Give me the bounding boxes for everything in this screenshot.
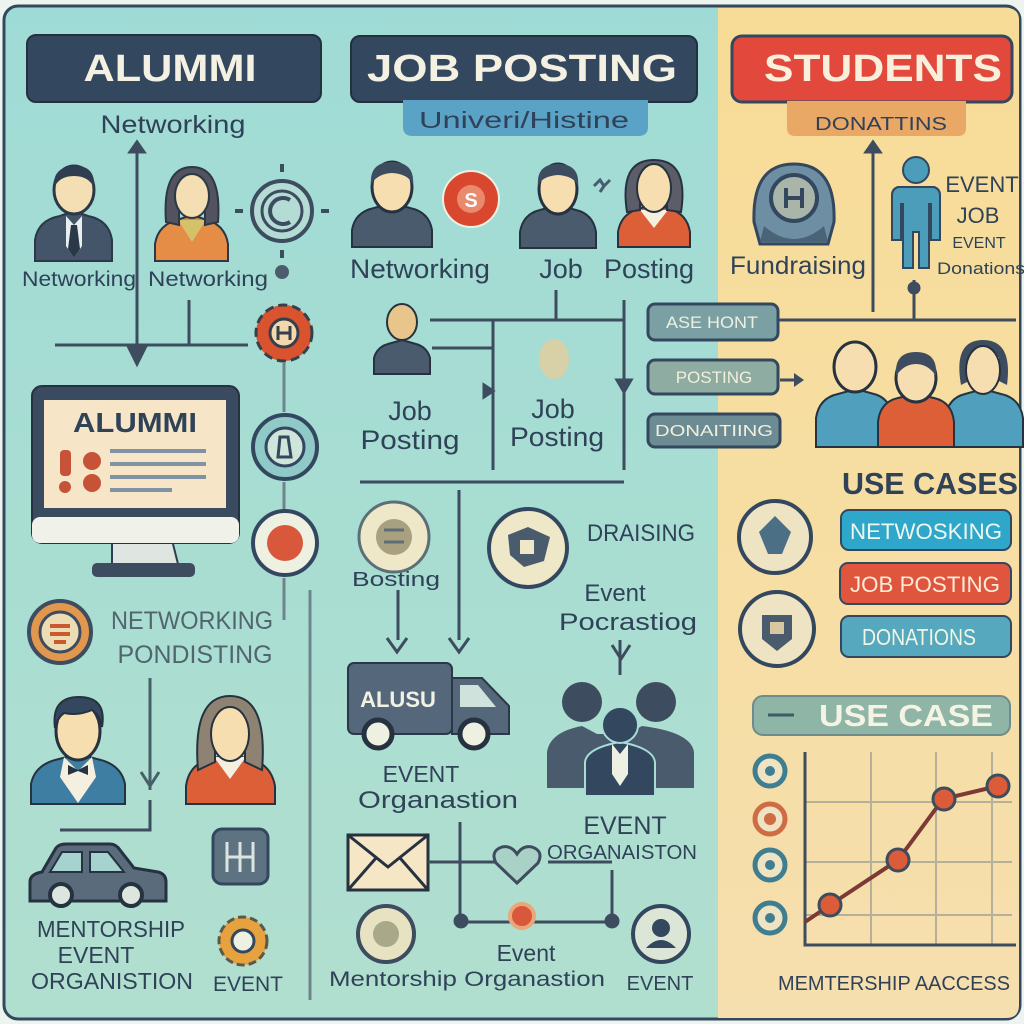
icon: faded person [539, 339, 569, 379]
icon: person small [374, 304, 430, 374]
text: event job list: Donations [937, 259, 1024, 278]
tag: donations [648, 414, 780, 447]
icon: mentorship circle [358, 906, 414, 962]
icon: computer monitor [32, 386, 239, 577]
panel: students column [648, 36, 1024, 995]
icon: red gear [256, 305, 312, 361]
label: event: EVENT [213, 973, 283, 996]
label: event bottom: EVENT [627, 973, 693, 995]
icon: car [30, 844, 166, 906]
panel: alumni column [22, 35, 329, 1000]
chart line [805, 786, 998, 922]
subheading: university posting [403, 100, 648, 136]
icon: woman [155, 167, 228, 261]
icon: person middle [520, 164, 596, 248]
icon: orange gear [219, 917, 267, 965]
label: job posting left [360, 396, 460, 455]
tag: posting [648, 360, 778, 394]
pill: networking [841, 510, 1011, 550]
icon: envelope [348, 835, 428, 890]
text: networking pondisting: NETWORKING [111, 607, 273, 635]
label: job posting center: Posting [510, 422, 604, 452]
icon: teal circle document [253, 415, 317, 479]
icon: target badge [235, 164, 329, 279]
label: event organisation left [358, 761, 518, 814]
pill: donations: DONATIONS [862, 624, 976, 650]
icon: use case circle top [739, 501, 811, 573]
icon: person circle [633, 906, 689, 962]
arrow: tag to group [780, 373, 804, 387]
chart axes [805, 752, 1016, 945]
heading: students: STUDENTS [764, 48, 1002, 90]
pill: use case [753, 696, 1010, 735]
icon: red coin: S [464, 190, 478, 212]
icon: man with tie [35, 166, 112, 261]
icon: woman right [618, 160, 690, 247]
label: job posting left: Posting [360, 425, 460, 455]
tag: posting: POSTING [676, 368, 752, 387]
label: job posting center: Job [531, 394, 575, 424]
connector lines [360, 290, 631, 675]
label: networking: Networking [350, 254, 490, 284]
icon: heart [494, 847, 540, 883]
text: event job list: EVENT [945, 172, 1019, 197]
icon: fundraising person [754, 164, 834, 244]
pill: job posting: JOB POSTING [850, 572, 1000, 597]
label: event pocrastiog [559, 580, 697, 636]
subheading: donations: DONATTINS [815, 114, 947, 134]
label: job posting left: Job [388, 396, 432, 426]
tag: ase hont [648, 304, 778, 340]
icon: orange badge [29, 601, 91, 663]
text: event job list: EVENT [952, 235, 1006, 252]
text: networking pondisting [111, 607, 273, 669]
text: event job list: JOB [957, 203, 999, 228]
subheading: university posting: Univeri/Histine [419, 107, 629, 133]
text: mentorship event organisation: EVENT [58, 942, 134, 968]
chart points [819, 775, 1009, 916]
chart: line chart [755, 752, 1016, 945]
icon: man in suit [31, 697, 125, 804]
heading: job posting: JOB POSTING [367, 48, 677, 90]
text: monitor title: ALUMMI [73, 407, 197, 438]
tag: ase hont: ASE HONT [666, 313, 758, 332]
label: networking right: Networking [148, 268, 268, 291]
text: networking pondisting: PONDISTING [118, 641, 272, 669]
panel: job posting column [329, 36, 697, 995]
icon: students group [816, 340, 1023, 447]
icon: woman in red [186, 696, 275, 804]
connector lines lower [428, 822, 618, 927]
label: bosting: Bosting [352, 569, 440, 591]
pill: networking: NETWOSKING [850, 519, 1002, 544]
label: event organisation right: ORGANAISTON [547, 842, 697, 864]
heading: students [732, 36, 1012, 102]
label: event organisation left: EVENT [383, 761, 459, 787]
icon: delivery truck [348, 663, 509, 748]
label: event organisation right [547, 812, 697, 864]
label: event pocrastiog: Event [584, 580, 646, 607]
label: fundraising: Fundraising [730, 252, 866, 280]
text: mentorship event organisation: ORGANISTION [31, 968, 193, 994]
label: networking top: Networking [100, 111, 246, 139]
arrow: down small [141, 678, 159, 790]
label: mentorship access: MEMTERSHIP AACCESS [778, 973, 1010, 995]
icon: map circle [489, 509, 567, 587]
label: event center: Event [497, 940, 556, 966]
label: networking left: Networking [22, 268, 136, 291]
label: mentorship organisation: Mentorship Organastion [329, 968, 605, 991]
icon: standing figure [892, 157, 940, 268]
text: event job list [937, 172, 1024, 278]
icon: red dot [510, 904, 534, 928]
label: event pocrastiog: Pocrastiog [559, 609, 697, 636]
pill: job posting [840, 563, 1011, 604]
subheading: donations [787, 101, 966, 136]
pill: donations [841, 616, 1011, 657]
arrow: students vertical [655, 142, 1016, 320]
pill: use case: USE CASE [819, 698, 993, 733]
label: job posting center [510, 394, 604, 452]
monitor content [59, 450, 206, 493]
chart legend icons [755, 756, 785, 933]
heading: job posting [351, 36, 697, 102]
icon: group of people [547, 682, 694, 796]
icon: document tile [213, 829, 268, 884]
connector: elbow [60, 800, 150, 830]
label: event organisation right: EVENT [583, 812, 667, 840]
chart grid [805, 752, 1012, 945]
label: job: Job [539, 254, 583, 284]
label: posting: Posting [604, 254, 694, 284]
icon: red coin [443, 171, 499, 227]
arrow: vertical alumni connector [55, 142, 248, 364]
label: event organisation left: Organastion [358, 787, 518, 814]
heading: use cases: USE CASES [842, 466, 1018, 501]
icon: use case circle bottom [740, 592, 814, 666]
heading: alumni: ALUMMI [84, 48, 256, 90]
icon: red circle [253, 511, 317, 575]
heading: alumni [27, 35, 321, 102]
arrow: alumni chain connector [284, 362, 310, 1000]
label: draising: DRAISING [587, 520, 695, 547]
icon: person left [352, 162, 432, 247]
text: mentorship event organisation: MENTORSHIP [37, 916, 185, 942]
icon: small sparkle [594, 180, 610, 192]
icon: delivery truck: ALUSU [360, 687, 436, 712]
icon: document circle [359, 502, 429, 572]
tag: donations: DONAITIING [655, 423, 773, 440]
text: mentorship event organisation [31, 916, 193, 994]
